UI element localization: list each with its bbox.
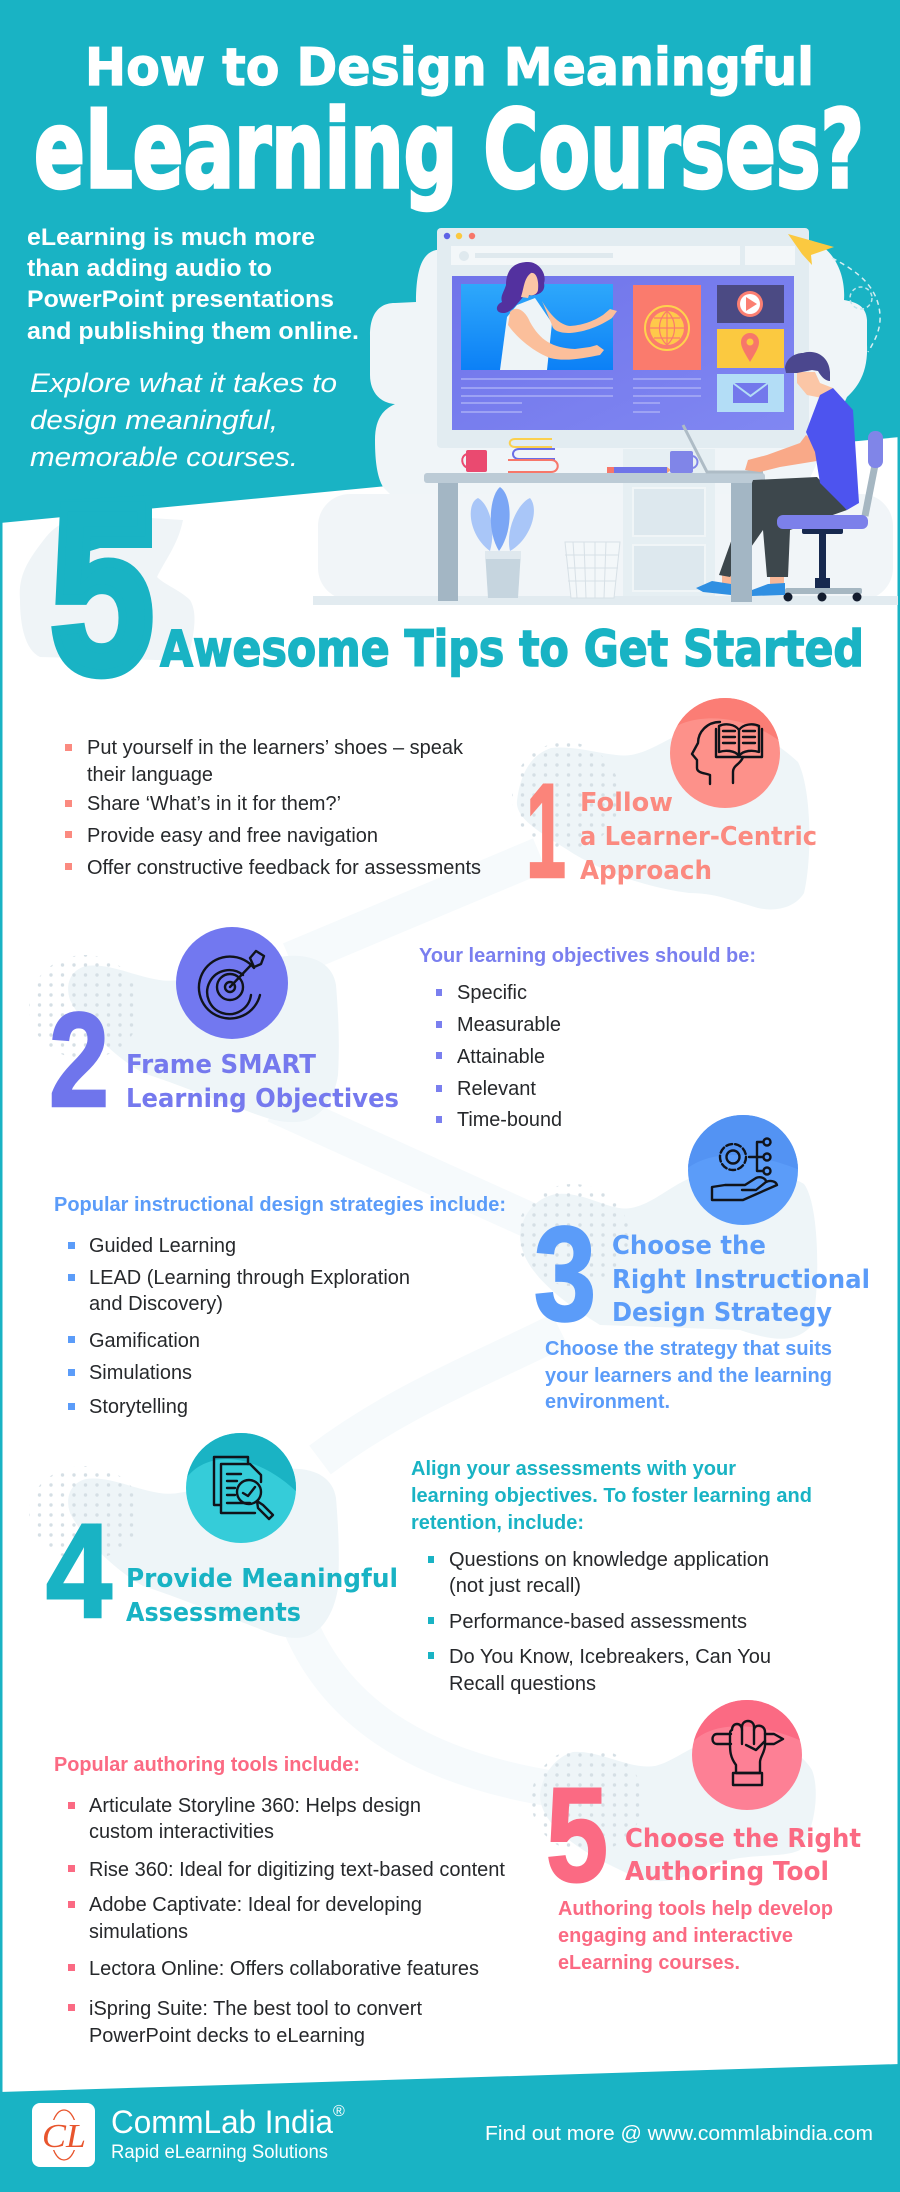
website link: Find out more @ www.commlabindia.com xyxy=(485,2123,873,2145)
assessments text and list: retention, include: xyxy=(411,1512,584,1534)
heading: Choose the xyxy=(612,1231,766,1261)
strategies list: Simulations xyxy=(89,1362,192,1384)
assessments text and list: (not just recall) xyxy=(449,1575,581,1597)
logo: CL xyxy=(42,2118,86,2155)
icon: documents with magnifier xyxy=(185,1430,300,1543)
assessments text and list: Align your assessments with your xyxy=(411,1458,736,1480)
heading: Design Strategy xyxy=(612,1298,832,1328)
description xyxy=(545,1338,832,1413)
assessments text and list xyxy=(411,1458,812,1695)
tip 1 background blob xyxy=(517,725,809,909)
icon: gear network over hand xyxy=(685,1110,800,1225)
number 5: 5 xyxy=(546,1761,608,1910)
strategies list: LEAD (Learning through Exploration xyxy=(89,1267,410,1289)
intro text: PowerPoint presentations xyxy=(27,286,334,313)
desk xyxy=(424,473,765,602)
desk items: mug, books, pen, mug xyxy=(462,439,698,473)
authoring tools list: custom interactivities xyxy=(89,1821,274,1843)
heading: Learning Objectives xyxy=(126,1084,399,1114)
laptop xyxy=(683,425,763,472)
description: Choose the strategy that suits xyxy=(545,1338,832,1360)
assessments text and list: Performance-based assessments xyxy=(449,1611,747,1633)
authoring tools list: simulations xyxy=(89,1921,188,1943)
illustration: person at desk with elearning screen xyxy=(313,228,898,605)
intro text: and publishing them online. xyxy=(27,318,359,345)
plant xyxy=(471,487,534,598)
strategies list: and Discovery) xyxy=(89,1293,223,1315)
drawers xyxy=(623,449,715,596)
paper plane xyxy=(788,234,834,265)
title xyxy=(34,38,864,213)
footer xyxy=(0,2064,900,2192)
strategies list: Gamification xyxy=(89,1330,200,1352)
heading: Approach xyxy=(580,856,712,886)
bullet list xyxy=(65,737,481,879)
icon: head with open book xyxy=(670,698,780,808)
authoring tools list: Articulate Storyline 360: Helps design xyxy=(89,1795,421,1817)
tip 2 xyxy=(29,927,756,1135)
teal header background xyxy=(0,0,900,523)
assessments text and list: Do You Know, Icebreakers, Can You xyxy=(449,1646,771,1668)
intro text: Explore what it takes to xyxy=(30,368,337,398)
assessments text and list: learning objectives. To foster learning and xyxy=(411,1485,812,1507)
bullet list: Provide easy and free navigation xyxy=(87,825,378,847)
number 1: 1 xyxy=(526,757,566,906)
assessments text and list: Recall questions xyxy=(449,1673,596,1695)
brand name: ® xyxy=(333,2103,345,2120)
assessments text and list: Questions on knowledge application xyxy=(449,1549,769,1571)
tip 5 xyxy=(54,1695,861,2047)
heading: Assessments xyxy=(126,1598,301,1628)
authoring tools list: PowerPoint decks to eLearning xyxy=(89,2025,365,2047)
monitor xyxy=(437,228,809,448)
chair xyxy=(784,431,883,602)
bullet list: Share ‘What’s in it for them?’ xyxy=(87,793,341,815)
heading: Right Instructional xyxy=(612,1265,870,1295)
objectives list: Relevant xyxy=(457,1078,536,1100)
heading: Choose the Right xyxy=(625,1824,861,1854)
waste bin xyxy=(565,542,620,598)
authoring tools list xyxy=(54,1754,505,2047)
objectives list: Specific xyxy=(457,982,527,1004)
description: eLearning courses. xyxy=(558,1952,740,1974)
number 3: 3 xyxy=(534,1200,596,1349)
tip 5 background blob xyxy=(540,1735,816,1881)
objectives list: Attainable xyxy=(457,1046,545,1068)
heading: Authoring Tool xyxy=(625,1857,829,1887)
intro text xyxy=(27,224,359,472)
dots xyxy=(531,1747,643,1853)
intro text: design meaningful, xyxy=(30,405,278,435)
brand name xyxy=(111,2103,345,2163)
tip 2 background blob xyxy=(68,956,339,1122)
authoring tools list: Lectora Online: Offers collaborative features xyxy=(89,1958,479,1980)
big number 5 with shadow shape: 5 xyxy=(50,455,154,723)
strategies list: Guided Learning xyxy=(89,1235,236,1257)
authoring tools list: Popular authoring tools include: xyxy=(54,1754,360,1776)
tip 4 xyxy=(29,1430,812,1695)
heading: Frame SMART xyxy=(126,1050,316,1080)
bullet list: their language xyxy=(87,764,213,786)
logo xyxy=(32,2103,95,2167)
woman presenter xyxy=(497,262,617,370)
authoring tools list: Rise 360: Ideal for digitizing text-based content xyxy=(89,1859,505,1881)
description: engaging and interactive xyxy=(558,1925,793,1947)
intro text: memorable courses. xyxy=(30,442,298,472)
dots xyxy=(29,1466,141,1560)
bullet list: Offer constructive feedback for assessments xyxy=(87,857,481,879)
number 2: 2 xyxy=(49,986,109,1135)
bullet list: Put yourself in the learners’ shoes – speak xyxy=(87,737,464,759)
authoring tools list: iSpring Suite: The best tool to convert xyxy=(89,1998,422,2020)
heading: Follow xyxy=(580,788,673,818)
strategies list xyxy=(54,1194,506,1418)
brand name: Rapid eLearning Solutions xyxy=(111,2142,328,2163)
description: your learners and the learning xyxy=(545,1365,832,1387)
intro text: eLearning is much more xyxy=(27,224,315,251)
heading xyxy=(126,1564,398,1628)
title: How to Design Meaningful xyxy=(85,38,814,98)
heading xyxy=(612,1231,870,1328)
description xyxy=(558,1898,833,1974)
heading xyxy=(625,1824,861,1887)
dots xyxy=(512,742,620,850)
intro text: than adding audio to xyxy=(27,255,272,282)
tip 3 xyxy=(54,1110,870,1418)
strategies list: Storytelling xyxy=(89,1396,188,1418)
heading xyxy=(580,788,817,886)
dots xyxy=(517,1184,629,1286)
icon: target with dart xyxy=(176,927,288,1039)
objectives list: Your learning objectives should be: xyxy=(419,945,756,967)
brand name: CommLab India xyxy=(111,2104,333,2140)
number 4: 4 xyxy=(46,1497,112,1646)
person xyxy=(696,352,868,602)
dots xyxy=(29,955,141,1059)
description: environment. xyxy=(545,1391,670,1413)
objectives list: Time-bound xyxy=(457,1109,562,1131)
heading: a Learner-Centric xyxy=(580,822,817,852)
description: Authoring tools help develop xyxy=(558,1898,833,1920)
tip 3 background blob xyxy=(520,1172,817,1339)
icon: hand holding pencil xyxy=(692,1700,802,1810)
authoring tools list: Adobe Captivate: Ideal for developing xyxy=(89,1894,422,1916)
heading: Provide Meaningful xyxy=(126,1564,398,1594)
heading xyxy=(126,1050,399,1114)
background connecting path xyxy=(275,855,560,1790)
tip 1 xyxy=(65,690,817,909)
tip 4 background blob xyxy=(68,1469,339,1638)
objectives list: Measurable xyxy=(457,1014,561,1036)
strategies list: Popular instructional design strategies include: xyxy=(54,1194,506,1216)
objectives list xyxy=(419,945,756,1131)
